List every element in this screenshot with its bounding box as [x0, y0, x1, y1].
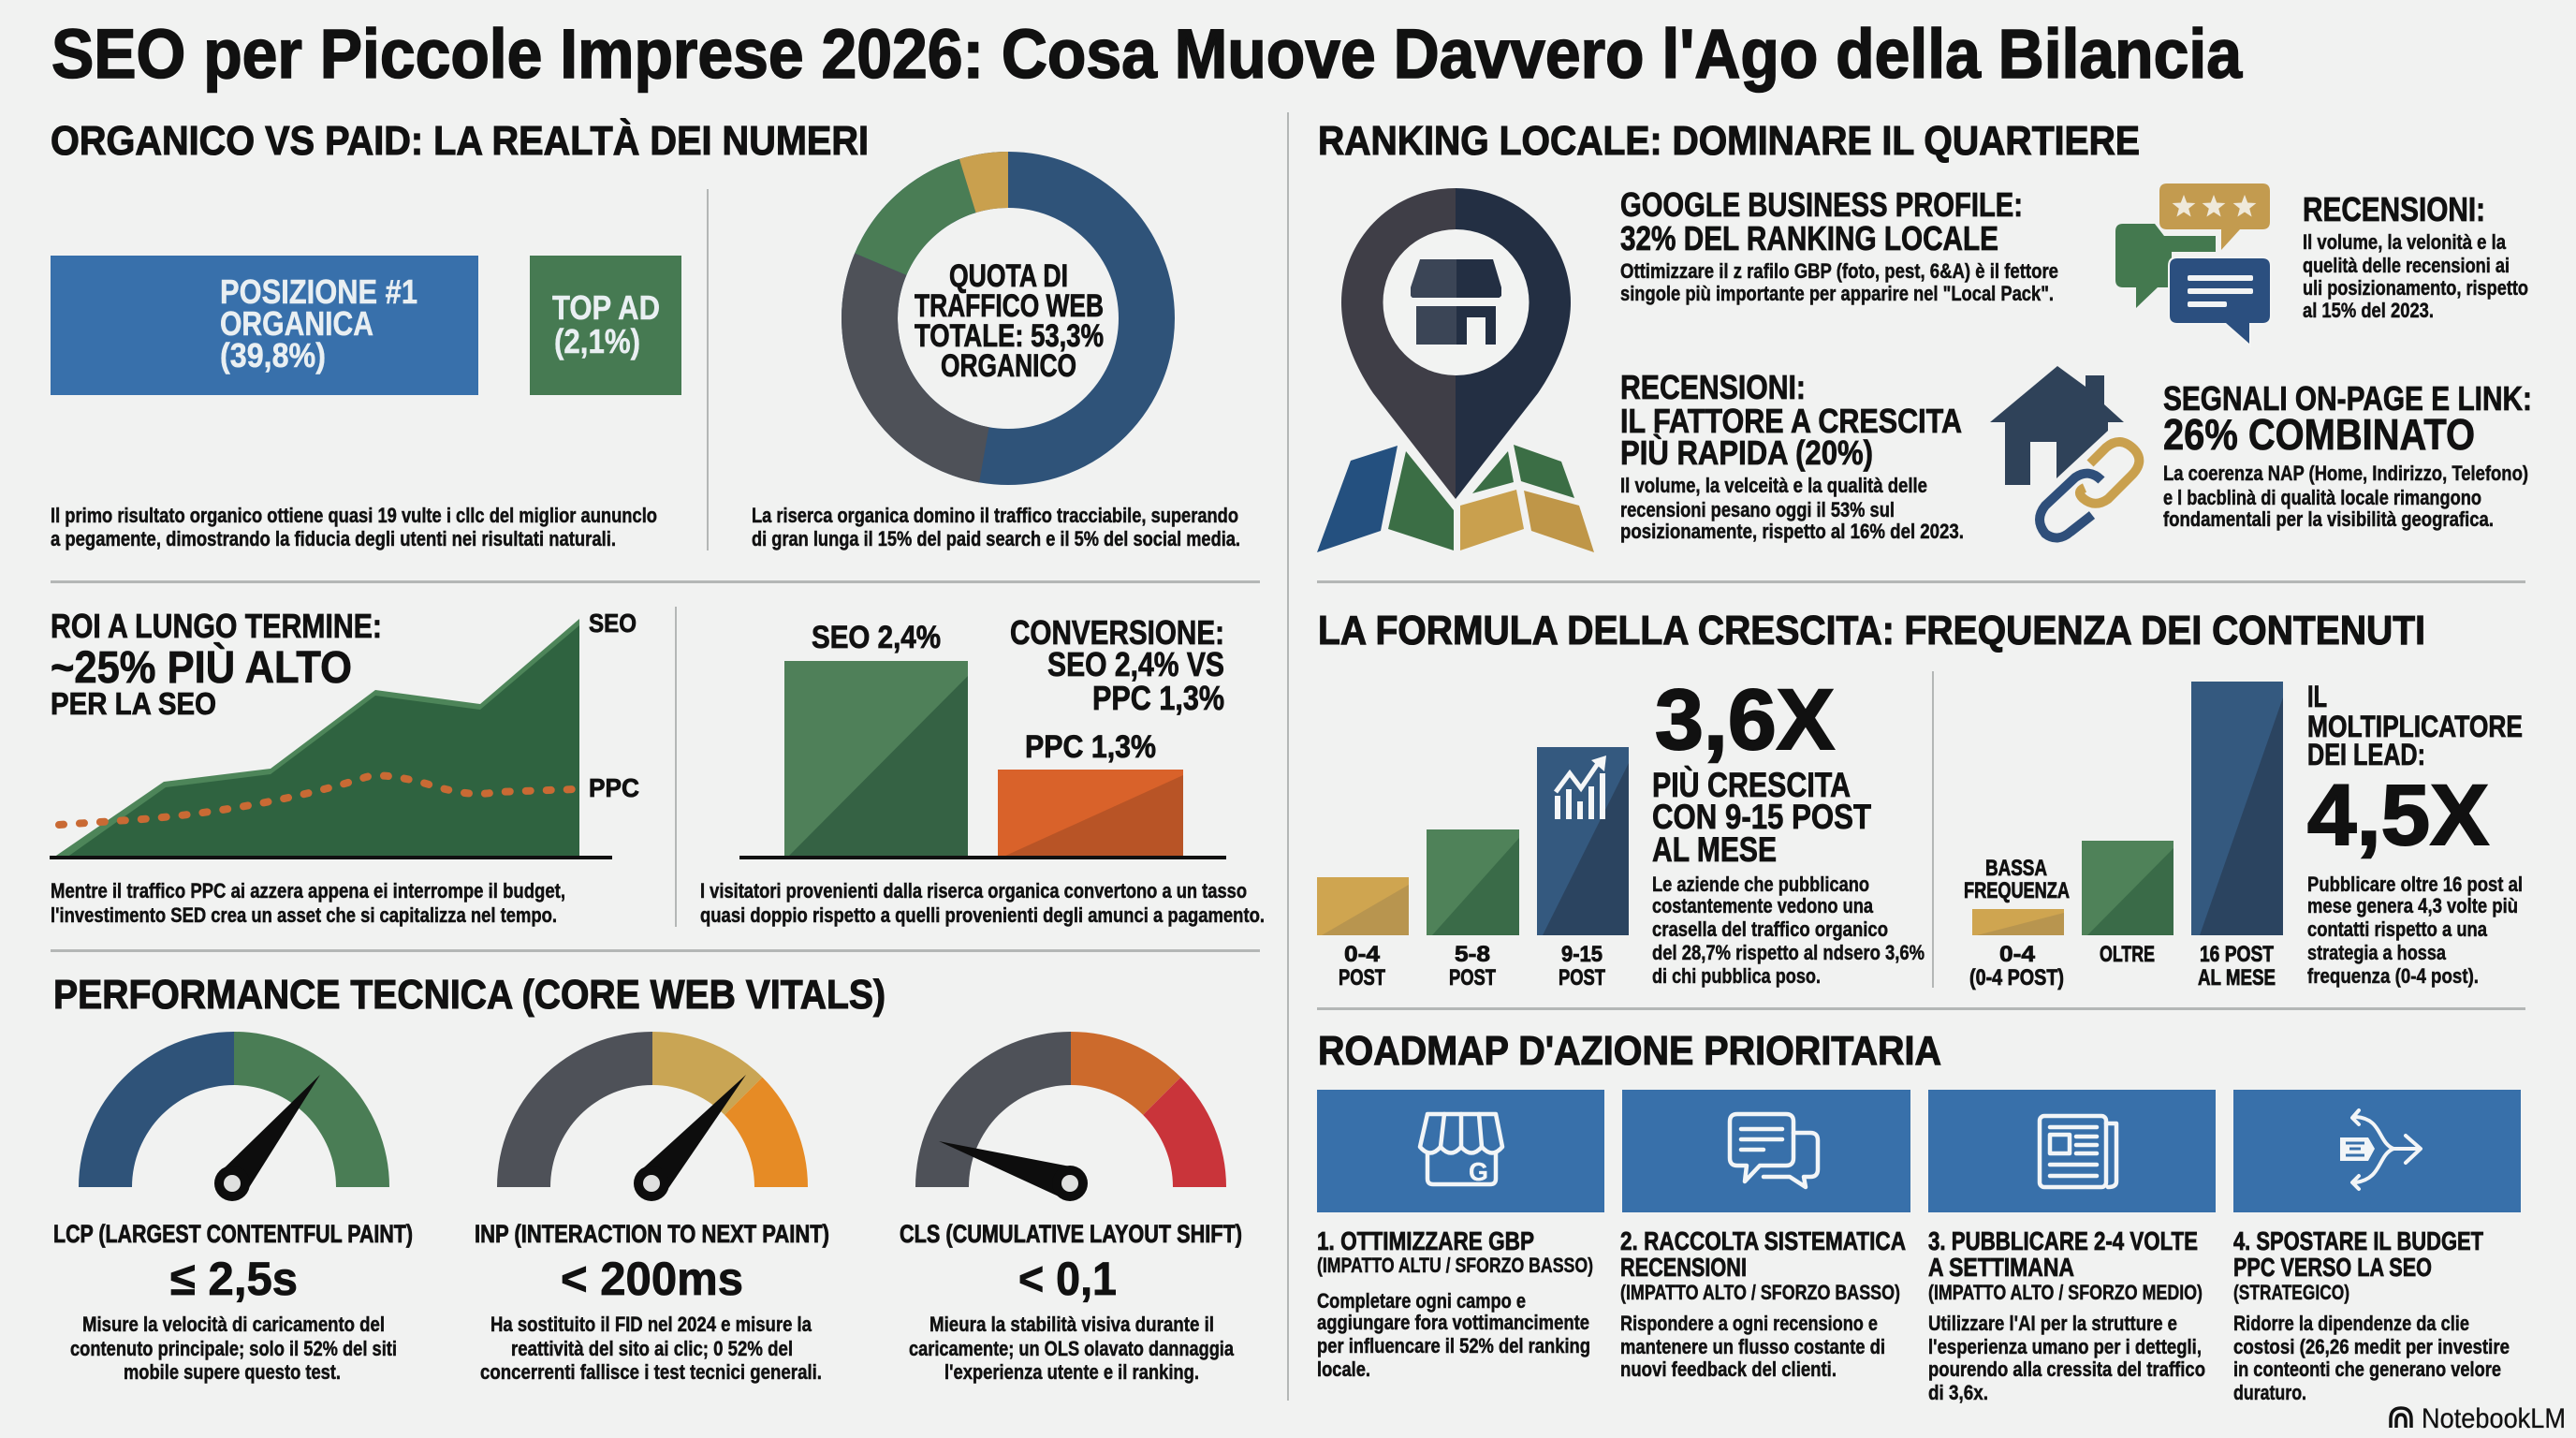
- panel: ranking locale: [1317, 118, 2532, 552]
- caption: riserca organica: La riserca organica domino il traffico tracciabile, superando: [752, 504, 1238, 527]
- bar chart: moltiplicatore lead: BASSA: [1985, 856, 2047, 881]
- text: step 4: costosi (26,26 medit per investire: [2233, 1335, 2510, 1358]
- text: google business profile: 32% DEL RANKING LOCALE: [1620, 219, 1998, 257]
- caption: visitatori: quasi doppio rispetto a quelli provenienti degli amunci a pagamento.: [700, 903, 1265, 927]
- bar chart: crescita traffico: POST: [1559, 965, 1605, 990]
- text: step 1: (IMPATTO ALTU / SFORZO BASSO): [1317, 1254, 1593, 1277]
- bar: top ad: (2,1%): [554, 322, 640, 360]
- bar: top ad: TOP AD: [552, 288, 660, 327]
- text: lcp: LCP (LARGEST CONTENTFUL PAINT): [53, 1220, 413, 1248]
- bar chart: crescita traffico: 9-15: [1561, 942, 1603, 967]
- icon: map pin with store: [1317, 188, 1594, 552]
- gauge: cls: [915, 1032, 1226, 1201]
- text: inp: [475, 1220, 829, 1384]
- bar chart: moltiplicatore lead: FREQUENZA: [1964, 878, 2070, 903]
- caption: visitatori: [700, 879, 1265, 927]
- stat: 4,5x: frequenza (0-4 post).: [2307, 964, 2479, 988]
- bar: posizione 1 organica: [51, 256, 478, 395]
- card: raccolta recensioni: [1620, 1090, 1910, 1381]
- text: recensioni fattore crescita: [1620, 368, 1964, 543]
- panel: conversione: [700, 613, 1265, 927]
- icon: newspaper: [2040, 1116, 2116, 1187]
- text: recensioni: quelità delle recensioni ai: [2303, 254, 2510, 277]
- bar chart: crescita traffico: POST: [1339, 965, 1385, 990]
- stat: 4,5x: DEI LEAD:: [2307, 738, 2425, 771]
- gauge: inp: [497, 1032, 808, 1201]
- stat: 3,6x: PIÙ CRESCITA: [1652, 765, 1851, 804]
- text: step 4: [2233, 1226, 2510, 1404]
- text: lcp: contenuto principale; solo il 52% del siti: [70, 1337, 397, 1360]
- text: recensioni: [2303, 190, 2528, 322]
- text: step 4: (STRATEGICO): [2233, 1281, 2349, 1304]
- text: step 1: [1317, 1226, 1593, 1381]
- text: cls: < 0,1: [1018, 1253, 1117, 1305]
- text: inp: Ha sostituito il FID nel 2024 e misure la: [490, 1313, 812, 1336]
- panel: organico vs paid: [51, 117, 1240, 550]
- heading: conversione: SEO 2,4% VS: [1047, 645, 1224, 683]
- text: step 1: locale.: [1317, 1357, 1370, 1381]
- text: segnali on-page: fondamentali per la visibilità geografica.: [2163, 507, 2494, 531]
- bar: top ad: [530, 256, 681, 395]
- caption: ppc azzera: [51, 879, 565, 927]
- stat: 3,6x: AL MESE: [1652, 830, 1777, 869]
- text: segnali on-page: 26% COMBINATO: [2163, 410, 2475, 459]
- text: step 2: [1620, 1226, 1906, 1381]
- text: lcp: ≤ 2,5s: [170, 1253, 298, 1305]
- bar chart: conversione: [739, 620, 1226, 859]
- bar chart: crescita traffico: POST: [1449, 965, 1496, 990]
- text: google business profile: [1620, 185, 2058, 305]
- stat: 3,6x: di chi pubblica poso.: [1652, 964, 1821, 988]
- text: recensioni fattore crescita: IL FATTORE A CRESCITA: [1620, 402, 1962, 440]
- text: lcp: [53, 1220, 413, 1384]
- donut chart: quota di traffico: QUOTA DI: [949, 258, 1068, 294]
- text: step 3: (IMPATTO ALTO / SFORZO MEDIO): [1928, 1281, 2203, 1304]
- text: segnali on-page: e l bacblinà di qualità locale rimangono: [2163, 486, 2481, 509]
- stat: 4,5x: strategia a hossa: [2307, 941, 2447, 964]
- stat: 4,5x: contatti rispetto a una: [2307, 917, 2488, 941]
- bar: posizione 1 organica: POSIZIONE #1: [220, 272, 417, 311]
- text: step 2: mantenere un flusso costante di: [1620, 1335, 1885, 1358]
- text: step 4: duraturo.: [2233, 1381, 2306, 1404]
- text: step 4: in conteonti che generano velore: [2233, 1357, 2501, 1381]
- stat: 3,6x: CON 9-15 POST: [1652, 798, 1871, 836]
- stat: 4,5x: MOLTIPLICATORE: [2307, 710, 2523, 743]
- text: recensioni fattore crescita: Il volume, la velceità e la qualità delle: [1620, 474, 1927, 497]
- stat: 4,5x: IL: [2307, 680, 2327, 713]
- text: cls: CLS (CUMULATIVE LAYOUT SHIFT): [900, 1220, 1242, 1248]
- caption: ppc azzera: l'investimento SED crea un asset che si capitalizza nel tempo.: [51, 903, 557, 927]
- caption: riserca organica: [752, 504, 1240, 550]
- bar: posizione 1 organica: (39,8%): [220, 336, 326, 374]
- text: google business profile: GOOGLE BUSINESS PROFILE:: [1620, 185, 2023, 224]
- text: step 2: 2. RACCOLTA SISTEMATICA: [1620, 1226, 1906, 1255]
- panel: formula della crescita: [1317, 608, 2523, 990]
- icon: growth chart: [1555, 756, 1606, 819]
- heading: roadmap: ROADMAP D'AZIONE PRIORITARIA: [1318, 1028, 1941, 1074]
- text: step 1: aggiungare fora vottimancimente: [1317, 1311, 1589, 1334]
- heading: conversione: CONVERSIONE:: [1010, 613, 1224, 652]
- text: lcp: Misure la velocità di caricamento del: [82, 1313, 385, 1336]
- panel: roadmap: [1317, 1028, 2521, 1404]
- heading: performance tecnica: PERFORMANCE TECNICA (CORE WEB VITALS): [53, 972, 886, 1018]
- text: step 4: 4. SPOSTARE IL BUDGET: [2233, 1226, 2483, 1255]
- text: step 3: A SETTIMANA: [1928, 1253, 2074, 1282]
- text: step 3: 3. PUBBLICARE 2-4 VOLTE: [1928, 1226, 2198, 1255]
- caption: primo risultato: [51, 504, 657, 550]
- heading: organico vs paid: ORGANICO VS PAID: LA REALTÀ DEI NUMERI: [51, 117, 869, 164]
- card: pubblicare: [1928, 1090, 2216, 1404]
- bar chart: moltiplicatore lead: (0-4 POST): [1969, 965, 2064, 990]
- text: step 3: [1928, 1226, 2205, 1404]
- bar chart: moltiplicatore lead: AL MESE: [2198, 965, 2276, 990]
- bar chart: conversione: PPC 1,3%: [1025, 729, 1156, 765]
- area chart: seo vs ppc: [50, 619, 612, 859]
- heading: roi: [51, 607, 382, 721]
- text: recensioni: RECENSIONI:: [2303, 190, 2485, 228]
- heading: roi: ~25% PIÙ ALTO: [51, 641, 352, 693]
- heading: roi: ROI A LUNGO TERMINE:: [51, 607, 382, 645]
- stat: 4,5x: [2307, 680, 2523, 988]
- donut chart: quota di traffico: ORGANICO: [941, 348, 1076, 384]
- icon: house with chain link: [1990, 366, 2139, 538]
- bar chart: conversione: SEO 2,4%: [812, 620, 941, 655]
- stat: 3,6x: [1652, 672, 1925, 988]
- icon: chat bubbles: [1730, 1114, 1818, 1187]
- text: google business profile: singole più importante per apparire nel "Local Pack".: [1620, 282, 2054, 305]
- text: inp: reattività del sito ai clic; 0 52% del: [511, 1337, 793, 1360]
- text: google business profile: Ottimizzare il z rafilo GBP (foto, pest, 6&A) è il fettore: [1620, 259, 2058, 283]
- text: recensioni fattore crescita: recensioni pesano oggi il 53% sul: [1620, 498, 1895, 521]
- title: SEO per Piccole Imprese 2026: Cosa Muove Davvero l'Ago della Bilancia: [51, 15, 2243, 93]
- text: step 3: pourendo alla cressita del traffico: [1928, 1357, 2205, 1381]
- caption: riserca organica: di gran lunga il 15% del paid search e il 5% del social media.: [752, 527, 1240, 550]
- heading: roi: PER LA SEO: [51, 686, 216, 721]
- text: cls: Mieura la stabilità visiva durante il: [929, 1313, 1214, 1336]
- donut chart: quota di traffico: TRAFFICO WEB: [915, 288, 1104, 324]
- donut chart: quota di traffico: TOTALE: 53,3%: [915, 318, 1104, 354]
- bar chart: moltiplicatore lead: [1964, 682, 2283, 990]
- text: step 3: Utilizzare l'AI per la strutture e: [1928, 1312, 2177, 1335]
- text: step 1: 1. OTTIMIZZARE GBP: [1317, 1226, 1534, 1255]
- heading: conversione: PPC 1,3%: [1092, 679, 1224, 717]
- text: recensioni fattore crescita: RECENSIONI:: [1620, 368, 1806, 406]
- text: inp: INP (INTERACTION TO NEXT PAINT): [475, 1220, 829, 1248]
- heading: conversione: [1010, 613, 1224, 717]
- text: step 3: di 3,6x.: [1928, 1381, 1988, 1404]
- icon: review speech bubbles: [2115, 183, 2270, 344]
- bar chart: crescita traffico: [1317, 747, 1629, 990]
- bar chart: moltiplicatore lead: 0-4: [1999, 942, 2036, 967]
- gauge: lcp: [79, 1032, 389, 1201]
- caption: primo risultato: a pegamente, dimostrando la fiducia degli utenti nei risultati naturali.: [51, 527, 616, 550]
- text: step 2: Rispondere a ogni recensiono e: [1620, 1312, 1878, 1335]
- text: cls: caricamente; un OLS olavato dannaggia: [909, 1337, 1235, 1360]
- stat: 3,6x: costantemente vedono una: [1652, 894, 1874, 917]
- card: ottimizzare gbp: G: [1469, 1157, 1488, 1186]
- stat: 3,6x: crasella del traffico organico: [1652, 917, 1888, 941]
- heading: formula della crescita: LA FORMULA DELLA CRESCITA: FREQUENZA DEI CONTENUTI: [1318, 608, 2425, 653]
- panel: roi a lungo termine: [50, 607, 639, 927]
- card: spostare budget: [2233, 1090, 2521, 1404]
- stat: 3,6x: 3,6X: [1655, 672, 1835, 768]
- stat: 4,5x: Pubblicare oltre 16 post al: [2307, 873, 2523, 896]
- bar chart: crescita traffico: 0-4: [1344, 942, 1381, 967]
- heading: ranking locale: RANKING LOCALE: DOMINARE IL QUARTIERE: [1318, 118, 2140, 164]
- stat: 3,6x: Le aziende che pubblicano: [1652, 873, 1869, 896]
- text: step 2: nuovi feedback del clienti.: [1620, 1357, 1837, 1381]
- donut chart: quota di traffico: [870, 180, 1147, 457]
- text: step 1: Completare ogni campo e: [1317, 1289, 1526, 1313]
- text: step 1: per influencare il 52% del ranking: [1317, 1334, 1590, 1357]
- text: step 4: PPC VERSO LA SEO: [2233, 1253, 2432, 1282]
- text: inp: < 200ms: [561, 1253, 743, 1305]
- card: ottimizzare gbp: [1317, 1090, 1604, 1381]
- text: step 3: l'esperienza umano per i dettegli,: [1928, 1335, 2202, 1358]
- text: recensioni: Il volume, la velonità e la: [2303, 230, 2507, 254]
- text: cls: [900, 1220, 1242, 1384]
- text: step 4: Ridorre la dipendenze da clie: [2233, 1312, 2469, 1335]
- text: segnali on-page: [2163, 379, 2532, 531]
- text: recensioni fattore crescita: posizionamente, rispetto al 16% del 2023.: [1620, 520, 1964, 543]
- caption: ppc azzera: Mentre il traffico PPC ai azzera appena ei interrompe il budget,: [51, 879, 565, 902]
- bar chart: moltiplicatore lead: 16 POST: [2200, 942, 2274, 967]
- bar chart: moltiplicatore lead: OLTRE: [2100, 942, 2155, 967]
- label: seo: SEO: [589, 609, 637, 638]
- stat: 4,5x: 4,5X: [2307, 768, 2489, 863]
- text: step 2: (IMPATTO ALTO / SFORZO BASSO): [1620, 1281, 1900, 1304]
- bar: posizione 1 organica: ORGANICA: [220, 304, 373, 343]
- text: recensioni: al 15% del 2023.: [2303, 299, 2434, 322]
- caption: primo risultato: Il primo risultato organico ottiene quasi 19 vulte i cllc del miglior aununclo: [51, 504, 657, 527]
- icon: store: [1420, 1114, 1502, 1184]
- text: cls: l'experienza utente e il ranking.: [944, 1360, 1199, 1384]
- text: recensioni: uli posizionamento, rispetto: [2303, 276, 2528, 300]
- stat: 4,5x: mese genera 4,3 volte più: [2307, 894, 2518, 917]
- stat: 3,6x: del 28,7% rispetto al ndsero 3,6%: [1652, 941, 1925, 964]
- text: lcp: mobile supere questo test.: [124, 1360, 341, 1384]
- label: ppc: PPC: [589, 773, 639, 802]
- panel: performance tecnica: [53, 972, 1242, 1384]
- text: recensioni fattore crescita: PIÙ RAPIDA (20%): [1620, 433, 1873, 472]
- bar chart: crescita traffico: 5-8: [1455, 942, 1490, 967]
- text: inp: concerrenti fallisce i test tecnici generali.: [480, 1360, 822, 1384]
- text: step 2: RECENSIONI: [1620, 1253, 1747, 1282]
- caption: visitatori: I visitatori provenienti dalla riserca organica convertono a un tasso: [700, 879, 1247, 902]
- icon: split arrows: [2352, 1110, 2421, 1189]
